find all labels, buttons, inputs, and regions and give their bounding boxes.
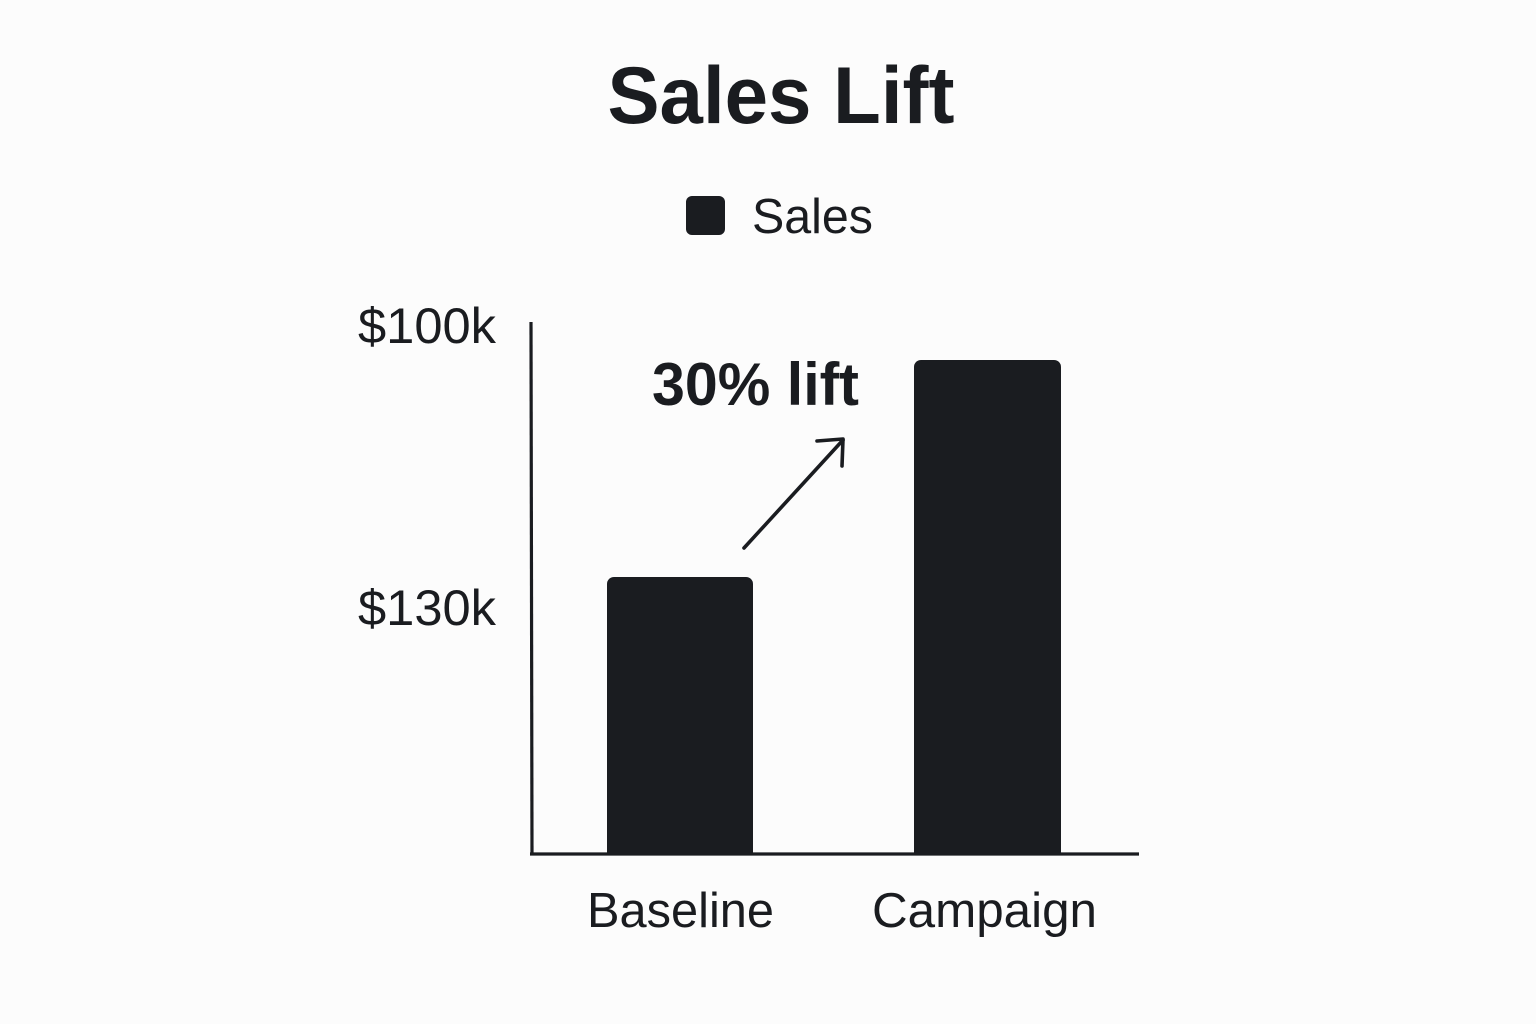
arrow <box>744 439 843 548</box>
x axis <box>530 852 1139 856</box>
bar chart <box>358 298 1139 938</box>
y-axis label: middle: $130k <box>358 580 497 636</box>
x-axis label: baseline: Baseline <box>587 884 774 938</box>
bar: baseline <box>607 577 753 855</box>
legend label: Sales <box>752 190 873 244</box>
bar: campaign <box>914 360 1061 855</box>
y-axis label: top: $100k <box>358 298 497 354</box>
y axis <box>531 322 532 855</box>
legend <box>686 190 873 244</box>
callout: 30% lift: 30% lift <box>652 351 859 418</box>
x-axis label: campaign: Campaign <box>872 884 1097 938</box>
legend swatch <box>686 196 725 235</box>
title: Sales Lift <box>608 51 954 141</box>
